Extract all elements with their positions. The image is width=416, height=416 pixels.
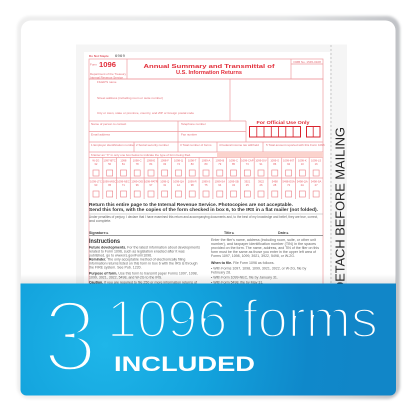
form type grid: 27 xyxy=(315,183,318,187)
filer fields: Email address xyxy=(91,132,111,136)
form type grid: 1098-C xyxy=(133,158,142,162)
form type grid: 5498-SA xyxy=(311,180,322,184)
form type grid: 1099-OID xyxy=(131,180,143,184)
form type grid: 79 xyxy=(218,162,222,166)
detach label: DETACH BEFORE MAILING xyxy=(332,127,348,291)
form type grid: 1098-Q xyxy=(174,158,183,162)
form type grid: 10 xyxy=(301,162,304,166)
signature line: Signature ▸ xyxy=(89,231,110,235)
return instructions: and complete. xyxy=(89,219,111,223)
form type grid: 43 xyxy=(232,183,235,187)
official use boxes xyxy=(250,120,320,137)
form number: 1096 xyxy=(99,62,116,69)
signature line: Title ▸ xyxy=(224,231,235,235)
form type grid: W-2G xyxy=(92,158,99,162)
1096 forms: 1096 forms xyxy=(107,290,378,349)
form header: Internal Revenue Service xyxy=(90,75,123,79)
form type grid: 1099-LS xyxy=(311,158,321,162)
form type grid: 1099-C xyxy=(229,158,238,162)
form type grid: 71 xyxy=(122,183,125,187)
form type grid: 1099-INT xyxy=(283,158,295,162)
instructions left column: Caution. If you are required to file 250 or more information returns of xyxy=(89,280,197,284)
form type grid: 5498-ESA xyxy=(282,180,295,184)
form header: Form xyxy=(90,62,98,66)
form type grid: 5498-QA xyxy=(297,180,308,184)
form header: OMB No. 1545-0108 xyxy=(293,60,321,64)
form type grid: 1099-MISC xyxy=(103,180,116,184)
return instructions: Under penalties of perjury, I declare that I have examined this return and accompanying documents and, to the best of my knowledge and belief, they are true, correct, xyxy=(89,215,318,219)
signature line xyxy=(89,231,323,236)
form title: Annual Summary and Transmittal of xyxy=(144,64,275,70)
signature line: Date ▸ xyxy=(278,231,290,235)
form type grid: 1098-F xyxy=(160,158,169,162)
form type grid: 1099-K xyxy=(298,158,307,162)
filer fields: Street address (including room or suite number) xyxy=(97,96,163,100)
form header: 6969 xyxy=(115,53,126,58)
form type grid: 1099-R xyxy=(188,180,197,184)
form type grid: 97 xyxy=(149,183,153,187)
instructions right column: form must be the same as those you enter in the upper left area of xyxy=(211,250,316,254)
instructions right column: • With Forms 1097, 1098, 1099, 3921, 3922, or W-2G, file by xyxy=(211,266,306,270)
instructions right column xyxy=(211,238,319,284)
filer fields: Telephone number xyxy=(181,122,206,126)
form type grid: 1099-Q xyxy=(160,180,169,184)
form type grid: 1099-QA xyxy=(173,180,184,184)
form type grid: 81 xyxy=(122,162,125,166)
form type grid: 1099-B xyxy=(215,158,224,162)
instructions left column: 1099, 3921, 3922, 5498, and W-2G to the IRS. xyxy=(89,276,162,280)
filer fields: Name of person to contact xyxy=(91,122,126,126)
form type grid: 03 xyxy=(163,162,167,166)
form header xyxy=(89,53,323,79)
form type grid: 1099-DIV xyxy=(255,158,267,162)
form type grid: 74 xyxy=(177,162,180,166)
instructions right column: Forms 1097, 1098, 1099, 3921, 3922, 5498, or W-2G. xyxy=(211,254,295,258)
form header: U.S. Information Returns xyxy=(176,70,242,76)
form type grid: 96 xyxy=(136,183,139,187)
form type grid: 92 xyxy=(287,162,291,166)
filer fields: 5 Total amount reported with this Form 1096 xyxy=(266,143,325,147)
instructions right column: provided on the form. The name, address, and TIN of the filer on this xyxy=(211,246,319,250)
instructions left column: the FIRE system. See Pub. 1220. xyxy=(89,266,142,270)
filer fields: City or town, state or province, country, and ZIP or foreign postal code xyxy=(97,111,194,115)
instructions right column: number), and taxpayer identification number (TIN) in the spaces xyxy=(211,242,316,246)
form type grid: 98 xyxy=(191,183,194,187)
form type grid xyxy=(89,158,323,199)
blue band xyxy=(20,281,396,396)
instructions right column: When to file. File Form 1096 as follows. xyxy=(211,261,274,265)
filer fields: 4 Federal income tax withheld xyxy=(219,143,259,147)
instructions left column: Future developments. For the latest information about developments xyxy=(89,246,200,250)
form type grid: 86 xyxy=(273,162,277,166)
filer fields: FILER'S name xyxy=(97,80,117,84)
official use boxes: For Official Use Only xyxy=(256,120,310,125)
return instructions xyxy=(89,202,323,223)
form type grid: 93 xyxy=(94,183,98,187)
form type grid: 1099-S xyxy=(202,180,211,184)
form type grid: 1098 xyxy=(120,158,127,162)
form type grid: 95 xyxy=(108,183,112,187)
filer fields xyxy=(89,79,325,299)
form type grid: 1099-PATR xyxy=(144,180,158,184)
form type grid: 85 xyxy=(232,162,235,166)
instructions right column: February 28. xyxy=(211,270,231,274)
form type grid: 31 xyxy=(163,183,167,187)
form type grid: 16 xyxy=(315,162,318,166)
form type grid: 1098-T xyxy=(188,158,197,162)
form type grid: 26 xyxy=(260,183,263,187)
filer fields: 6 Enter an "X" in only one box below to indicate the type of form being filed. xyxy=(91,153,191,157)
form type grid: 1098-E xyxy=(147,158,155,162)
form type grid: 1097-BTC xyxy=(103,158,116,162)
form type grid: 1099-CAP xyxy=(241,158,254,162)
form type grid: 5498 xyxy=(272,180,278,184)
filer fields: 3 Total number of forms xyxy=(180,143,212,147)
filer fields: 2 Social security number xyxy=(136,143,169,147)
form type grid: 1099-G xyxy=(270,158,279,162)
form type grid: 28 xyxy=(273,183,277,187)
numeral 3: 3 xyxy=(43,281,97,393)
form type grid: 32 xyxy=(94,162,98,166)
included: INCLUDED xyxy=(114,352,255,376)
return instructions: Return this entire page to the Internal Revenue Service. Photocopies are not acceptable. xyxy=(89,202,293,207)
form type grid: 73 xyxy=(246,162,249,166)
instructions right column: • With Form 5498, file by May 31. xyxy=(211,280,263,284)
filer fields: Fax number xyxy=(181,132,197,136)
instructions right column: • With Form 1099-NEC, file by January 31. xyxy=(211,276,278,280)
form header: Do Not Staple xyxy=(89,54,109,58)
instructions left column xyxy=(89,239,200,284)
form type grid: 83 xyxy=(191,162,194,166)
form type grid: 91 xyxy=(260,162,263,166)
return instructions: Send this form, with the copies of the form checked in box 6, to the IRS in a flat mailer (not folded). xyxy=(89,207,318,212)
form type grid: 3922 xyxy=(258,180,264,184)
form type grid: 1099-SA xyxy=(215,180,225,184)
shadow above band xyxy=(21,274,396,284)
form type grid: 25 xyxy=(246,183,249,187)
form type grid: 80 xyxy=(204,162,208,166)
perforation line xyxy=(330,45,332,283)
form header: Department of the Treasury xyxy=(90,72,126,76)
instructions left column: related to Form 1096, such as legislation enacted after it was xyxy=(89,250,185,254)
form type grid: 50 xyxy=(108,162,112,166)
form type grid: 84 xyxy=(149,162,153,166)
form type grid: 1A xyxy=(177,183,180,187)
form type grid: 3921 xyxy=(244,180,251,184)
form sheet xyxy=(76,44,348,299)
form type grid: 1099-A xyxy=(202,158,211,162)
form type grid: 72 xyxy=(287,183,291,187)
form type grid: 94 xyxy=(218,183,222,187)
instructions left column: Instructions xyxy=(89,239,121,245)
filer fields: 1 Employer identification number xyxy=(91,143,135,147)
form type grid: 2A xyxy=(301,183,304,187)
form type grid: 78 xyxy=(136,162,139,166)
instructions left column: published, go to www.irs.gov/Form1096. xyxy=(89,254,152,258)
instructions left column: Purpose of form. Use this form to transmit paper Forms 1097, 1098, xyxy=(89,272,198,276)
form type grid: 1099-NEC xyxy=(117,180,130,184)
instructions left column: Reminder. The only acceptable method of electronically filing xyxy=(89,258,185,262)
form type grid: 1099-SB xyxy=(228,180,239,184)
form type grid: 75 xyxy=(204,183,208,187)
instructions right column: Enter the filer's name, address (including room, suite, or other unit xyxy=(211,238,316,242)
instructions left column: information returns listed on this form in box 6 with the IRS is through xyxy=(89,262,197,266)
form type grid: 1099-LTC xyxy=(90,180,102,184)
